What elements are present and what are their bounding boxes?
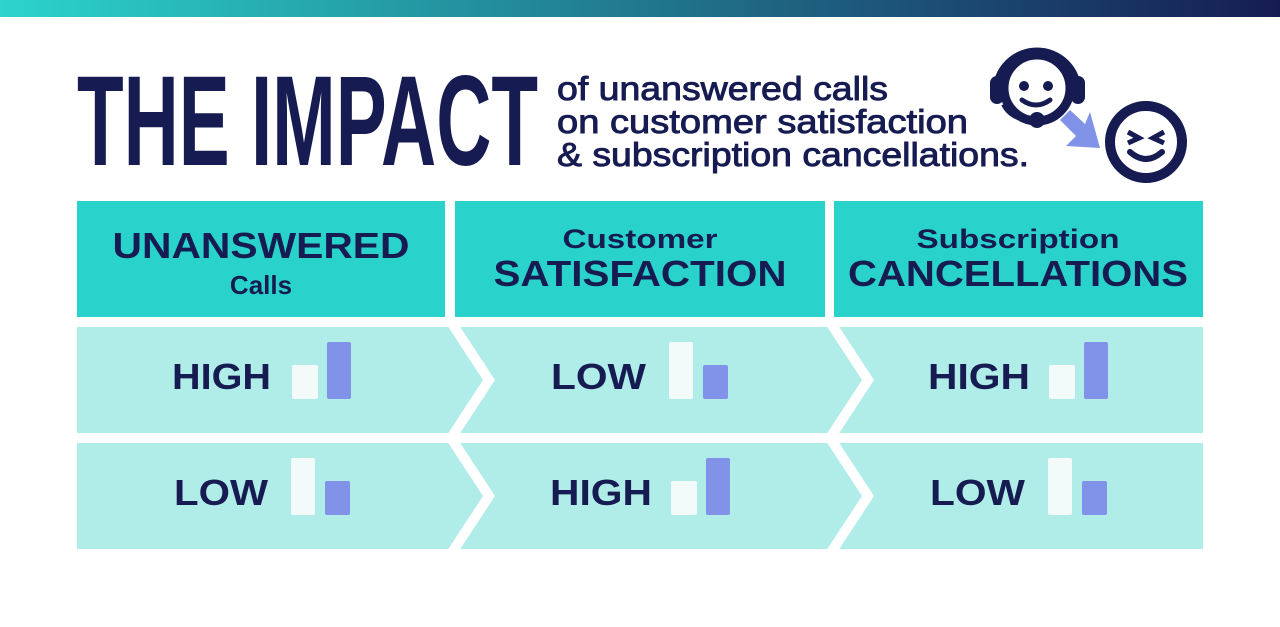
row 1: HIGH <box>928 356 1030 397</box>
icon: laughing face <box>1110 106 1182 178</box>
subtitle <box>557 70 1029 173</box>
row 2: HIGH <box>550 472 652 513</box>
header: subscription cancellations: CANCELLATIONS <box>848 253 1188 294</box>
header: subscription cancellations <box>834 201 1203 317</box>
header: unanswered calls: Calls <box>230 270 292 300</box>
icon: agent headset smiley <box>990 52 1085 128</box>
arrow <box>1060 110 1100 148</box>
row 2: LOW <box>174 472 268 513</box>
subtitle: & subscription cancellations. <box>557 136 1029 173</box>
header: customer satisfaction: SATISFACTION <box>494 253 786 294</box>
header: unanswered calls: UNANSWERED <box>112 225 410 266</box>
row 1: LOW <box>551 356 646 397</box>
row 2: LOW <box>930 472 1025 513</box>
row 1 <box>77 322 1203 438</box>
header: customer satisfaction <box>455 201 825 317</box>
subtitle: on customer satisfaction <box>557 103 968 140</box>
subtitle: of unanswered calls <box>557 70 888 107</box>
row 2 <box>0 433 1280 554</box>
title: THE IMPACT <box>77 50 538 193</box>
header: unanswered calls <box>77 201 445 317</box>
header: customer satisfaction: Customer <box>562 224 718 254</box>
header: subscription cancellations: Subscription <box>916 224 1120 254</box>
row 1: HIGH <box>172 356 271 397</box>
